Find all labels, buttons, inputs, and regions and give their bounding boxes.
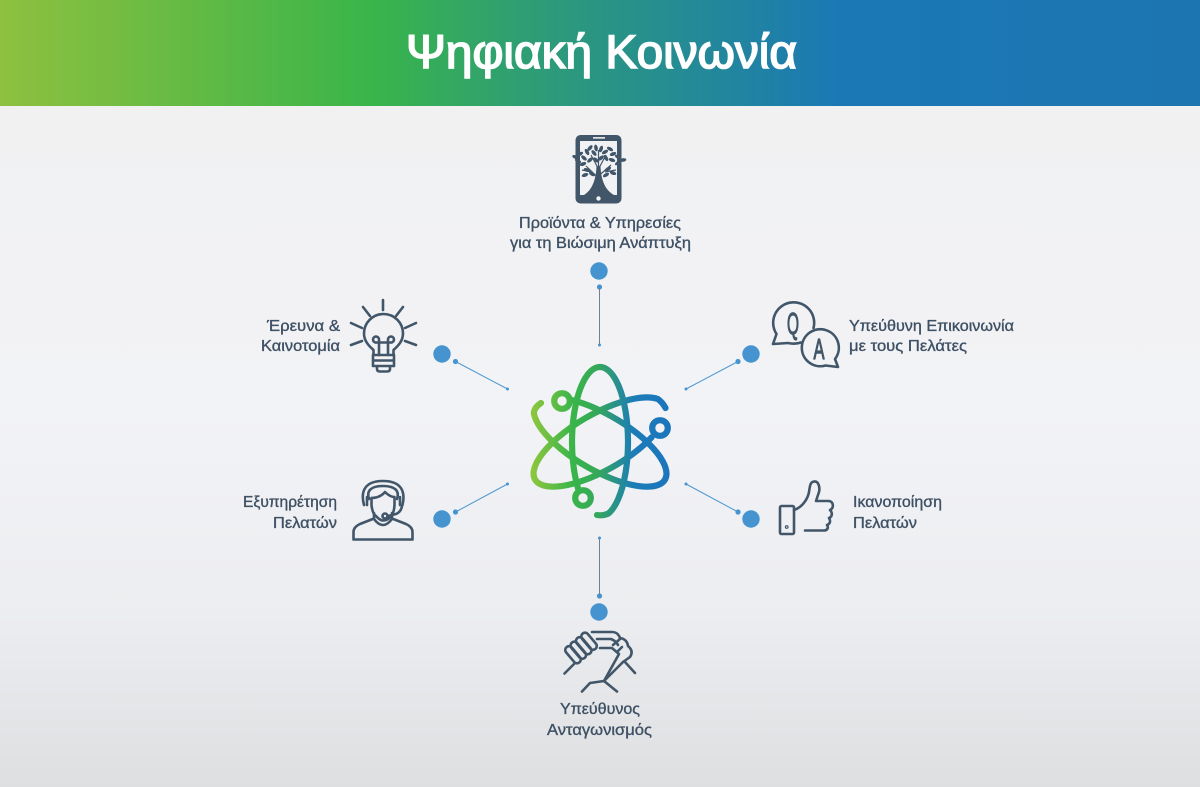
icon: Q and A speech bubbles: Q bbox=[787, 306, 799, 341]
label: customer service: Εξυπηρέτηση bbox=[243, 494, 337, 511]
label: customer satisfaction bbox=[853, 494, 942, 532]
connector: bottom bbox=[590, 536, 608, 621]
icon: Q and A speech bubbles bbox=[773, 302, 839, 367]
label: customer service bbox=[243, 494, 337, 532]
icon: thumbs up with phone bbox=[780, 481, 833, 534]
connector: lower left bbox=[433, 482, 509, 528]
connector: lower right bbox=[684, 482, 760, 528]
connector: upper left bbox=[433, 345, 509, 390]
label: research and innovation: Καινοτομία bbox=[261, 338, 340, 355]
connector: upper right bbox=[684, 345, 760, 390]
icon: Q and A speech bubbles: A bbox=[814, 334, 825, 366]
label: products and services: Προϊόντα & Υπηρεσίες bbox=[519, 215, 681, 232]
connector: top bbox=[590, 262, 608, 346]
label: products and services: για τη Βιώσιμη Ανάπτυξη bbox=[510, 235, 691, 252]
icon: phone with tree bbox=[572, 135, 627, 204]
label: responsible customer communication bbox=[849, 318, 1014, 355]
label: responsible customer communication: Υπεύθυνη Επικοινωνία bbox=[849, 318, 1014, 335]
title: Ψηφιακή Κοινωνία bbox=[406, 25, 797, 78]
label: products and services bbox=[510, 215, 691, 252]
label: responsible competition bbox=[547, 701, 652, 739]
icon: customer service agent with headset bbox=[354, 481, 412, 540]
label: research and innovation: Έρευνα & bbox=[266, 318, 341, 335]
icon: clasped hands bbox=[564, 631, 635, 692]
label: responsible competition: Υπεύθυνος bbox=[560, 701, 640, 718]
icon: light bulb bbox=[351, 300, 416, 372]
central atom icon bbox=[534, 367, 668, 515]
label: customer service: Πελατών bbox=[273, 515, 337, 532]
label: responsible customer communication: με τους Πελάτες bbox=[849, 338, 967, 355]
header band bbox=[0, 0, 1200, 106]
label: responsible competition: Ανταγωνισμός bbox=[547, 722, 652, 739]
label: research and innovation bbox=[261, 318, 341, 355]
label: customer satisfaction: Ικανοποίηση bbox=[853, 494, 942, 511]
label: customer satisfaction: Πελατών bbox=[853, 515, 917, 532]
